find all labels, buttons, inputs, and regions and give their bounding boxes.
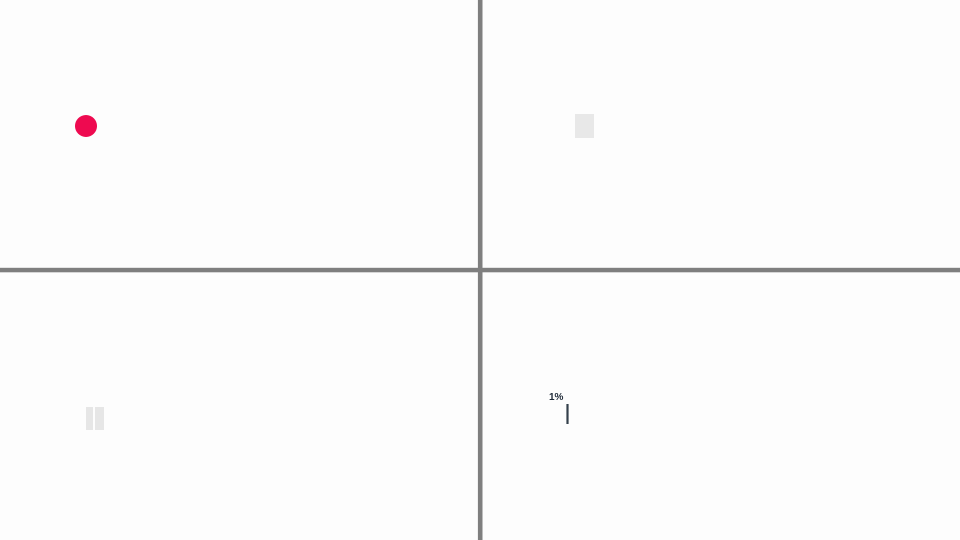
percentage label: 1% — [549, 392, 563, 403]
icon: grey square — [575, 114, 594, 138]
progress bar — [566, 404, 569, 424]
icon: red circle — [75, 115, 97, 137]
icon: grey double bars — [86, 407, 104, 430]
